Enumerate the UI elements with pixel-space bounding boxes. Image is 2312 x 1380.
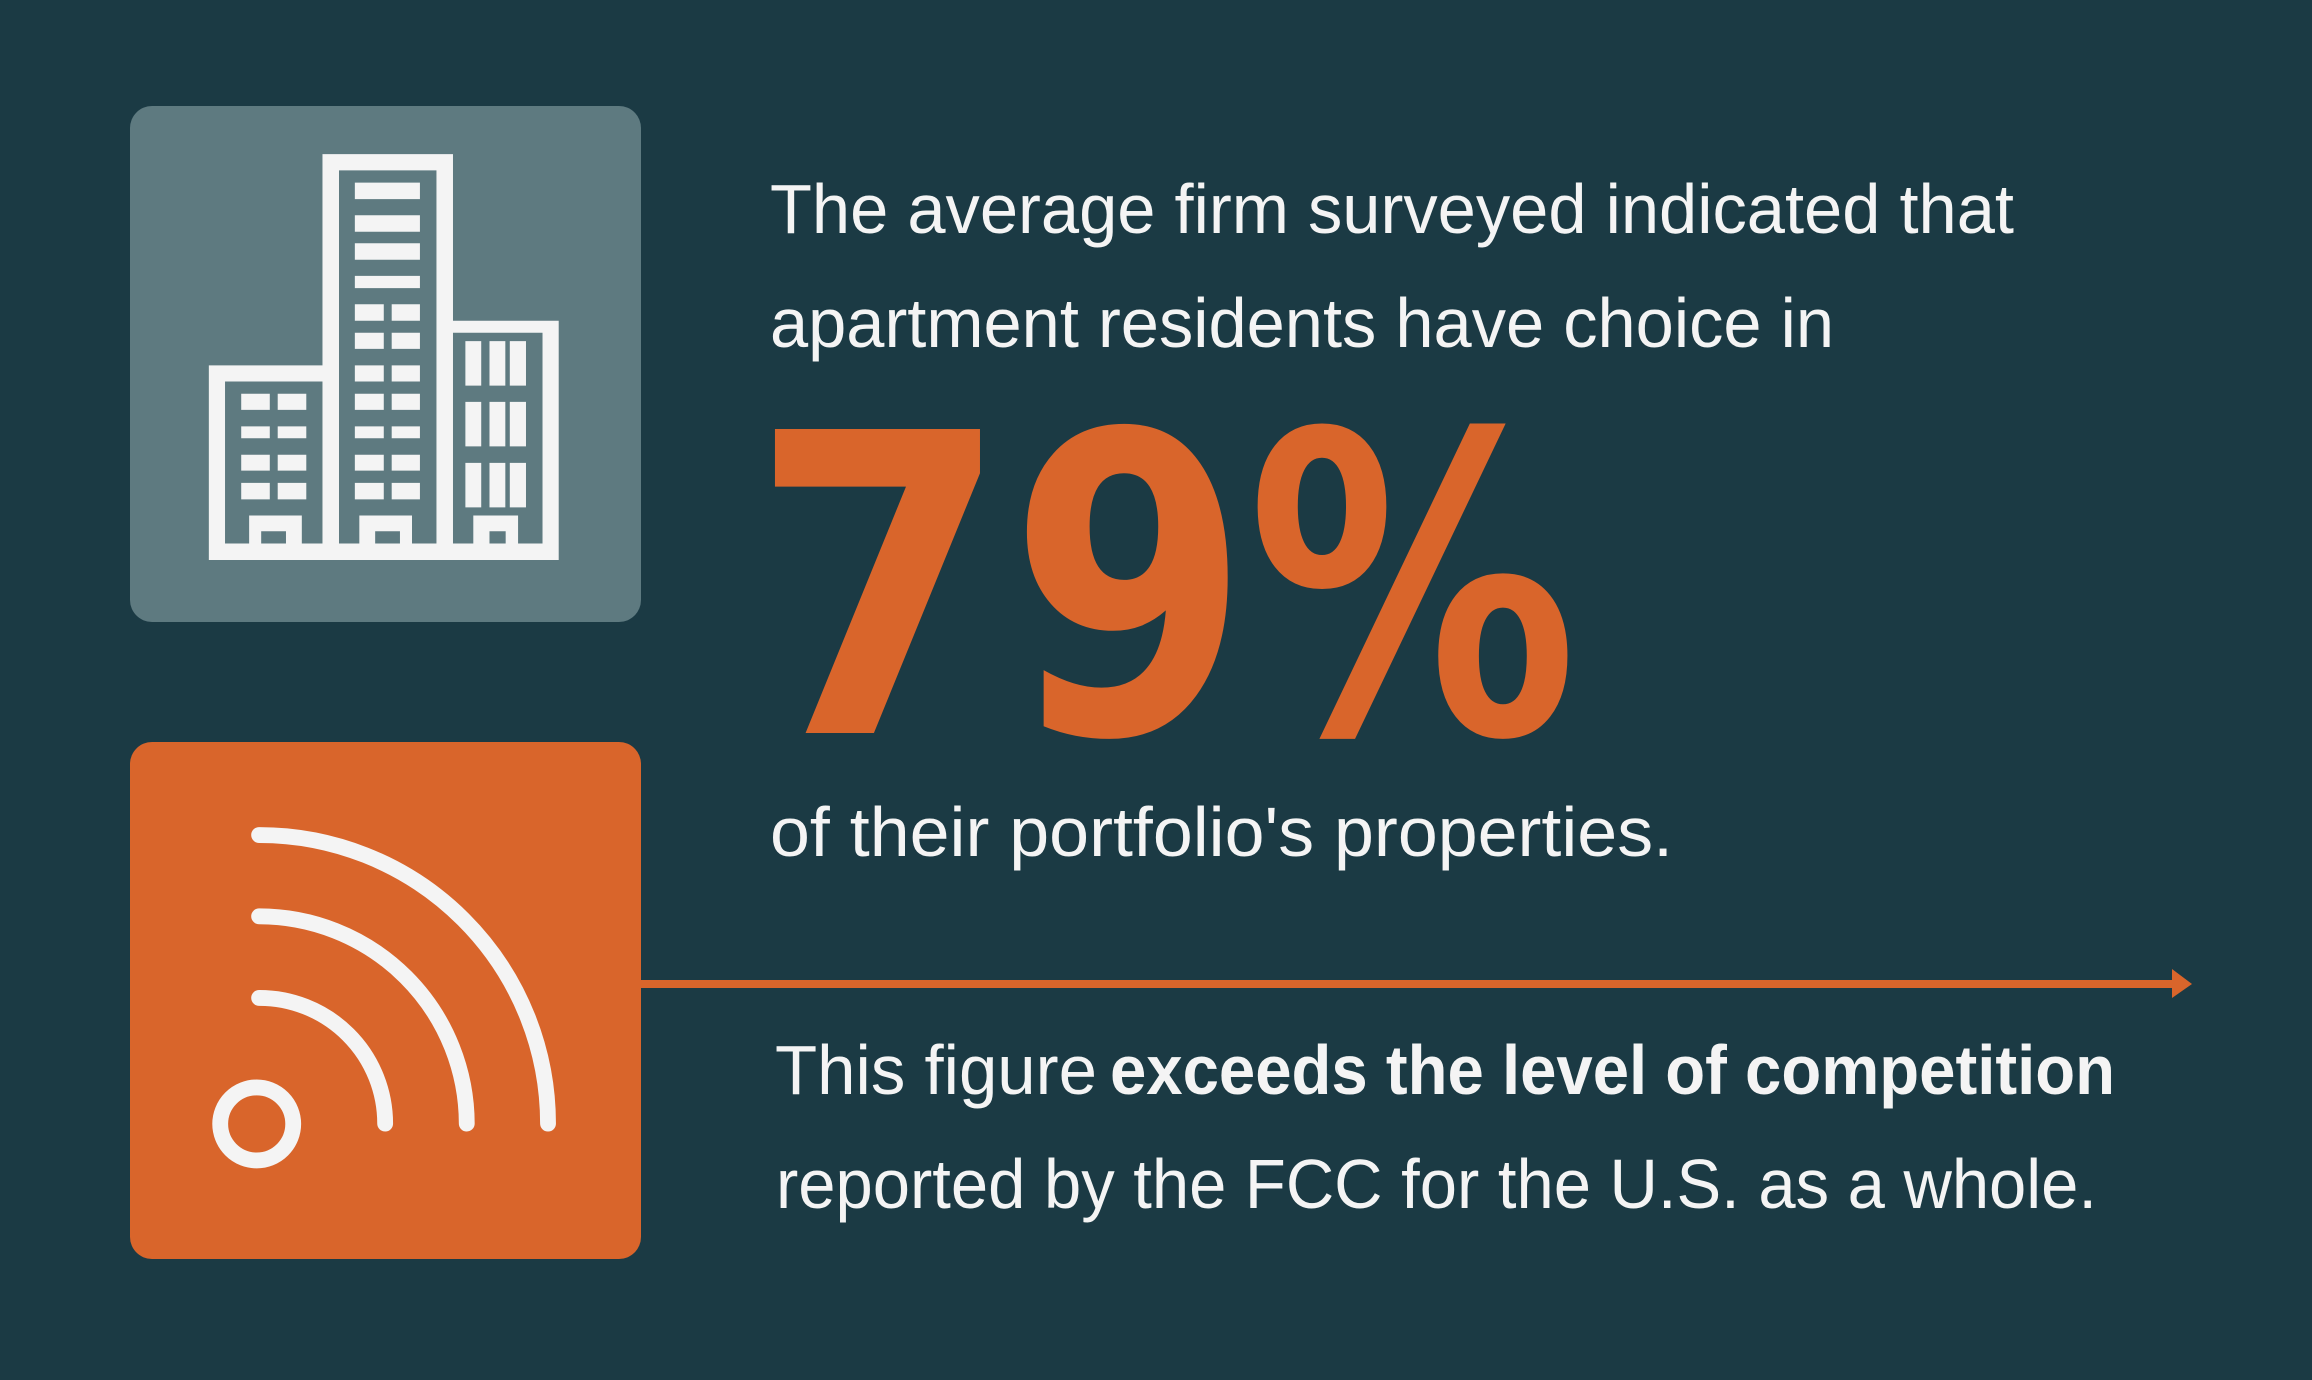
- text: FCC comparison: reported by the FCC for the U.S. as a whole.: [776, 1145, 2097, 1223]
- icon: wireless signal: [220, 835, 548, 1160]
- big number: 79%: 7: [750, 347, 1010, 832]
- icon: apartment buildings: [209, 154, 559, 560]
- text: survey intro: The average firm surveyed indicated that: [770, 170, 2014, 248]
- text: FCC comparison: [775, 1031, 2115, 1223]
- panel: buildings icon tile: [130, 106, 641, 622]
- panel: wireless signal icon tile: [130, 742, 641, 1259]
- arrow: connector from signal tile: [640, 969, 2192, 998]
- text: FCC comparison: This figure: [775, 1031, 1097, 1109]
- big number: 79%: 9: [1009, 347, 1250, 832]
- text: survey intro: [770, 170, 2014, 362]
- text: portfolio line: of their portfolio's properties.: [770, 793, 1673, 871]
- big number: 79%: %: [1247, 346, 1578, 832]
- text: survey intro: apartment residents have choice in: [770, 284, 1834, 362]
- text: FCC comparison: exceeds the level of competition: [1110, 1031, 2115, 1109]
- big number: 79%: [750, 346, 1578, 832]
